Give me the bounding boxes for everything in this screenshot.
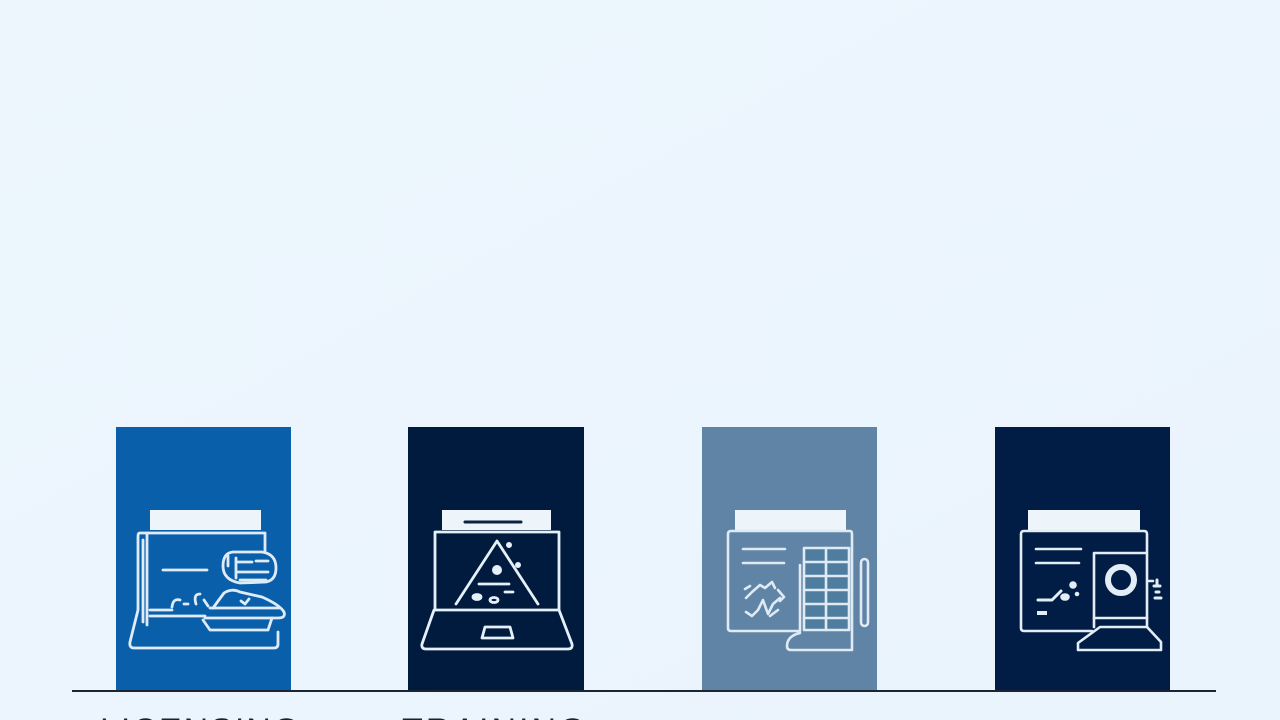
icon: licensing laptop with hand (130, 510, 284, 648)
icon: document with data table (728, 510, 868, 650)
icon: training laptop with pyramid (422, 510, 572, 649)
panel: document and monitor (995, 427, 1170, 691)
icon: document with monitor (1021, 510, 1161, 650)
panel: training (408, 427, 584, 691)
baseline rule (72, 690, 1216, 692)
panel: licensing (116, 427, 291, 691)
panel: document and table (702, 427, 877, 691)
